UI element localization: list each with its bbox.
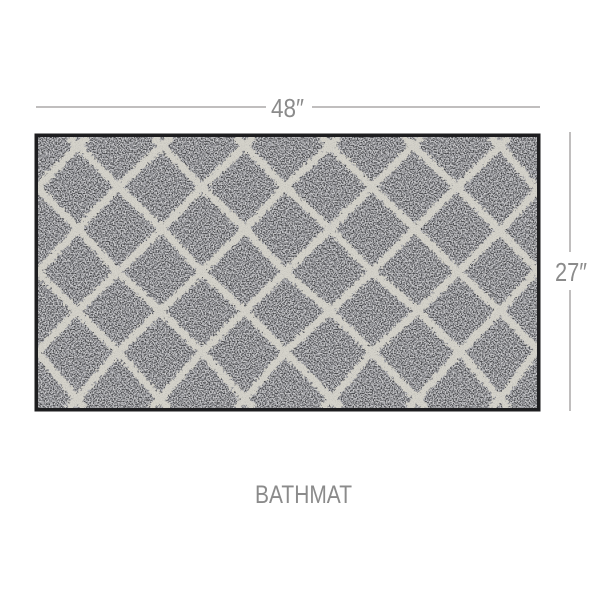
rug black border [34, 134, 540, 412]
height dimension: 27 inches: 27″ [555, 257, 587, 287]
rug grey shag field [32, 137, 542, 408]
bathmat rug [32, 134, 542, 412]
width dimension: 48 inches: 48″ [271, 93, 304, 123]
product label: BATHMAT [255, 481, 352, 509]
